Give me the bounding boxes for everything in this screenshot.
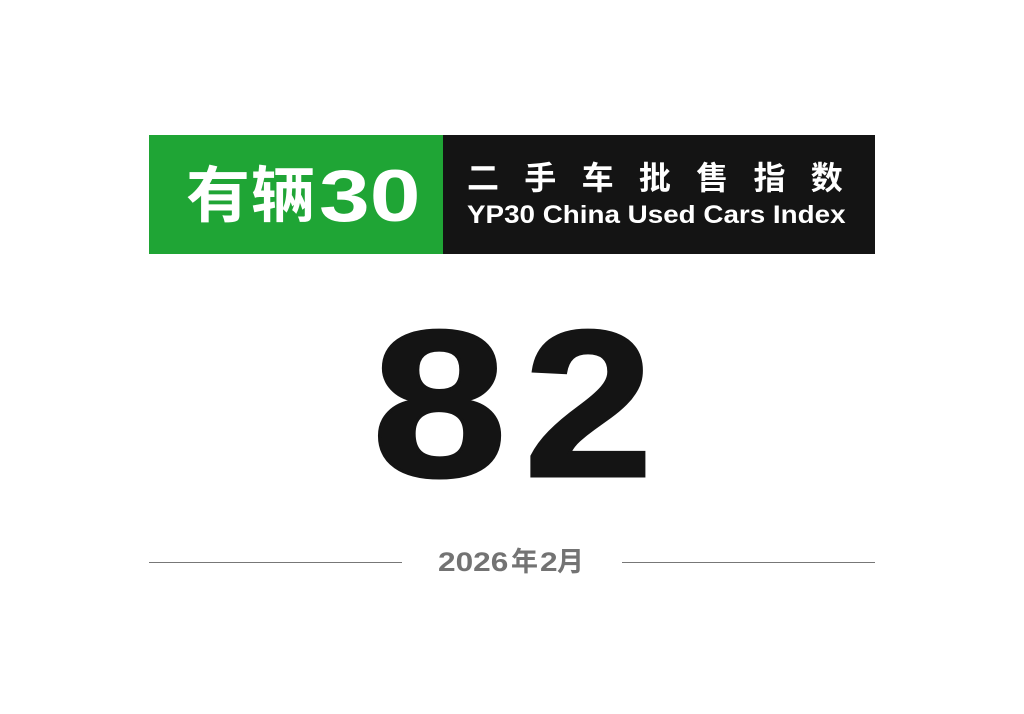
date label: 月: [557, 547, 584, 577]
digit 8: 8: [372, 288, 507, 521]
date label: 2: [540, 547, 558, 577]
date row: [149, 547, 875, 577]
brand title: Chinese: 有辆: [186, 161, 316, 230]
date label: 2026: [438, 547, 508, 577]
date label: [438, 547, 584, 577]
index value: [372, 288, 653, 521]
panel: green brand block: [149, 135, 443, 254]
panel: black index name block: [443, 135, 875, 254]
digit 2: 2: [524, 288, 653, 521]
brand title: number: 30: [319, 156, 421, 237]
English index name: YP30 China Used Cars Index: [467, 201, 846, 229]
header banner: [149, 135, 875, 254]
date label: 年: [511, 547, 538, 577]
Chinese index name: 二手车批售指数: [467, 160, 868, 196]
